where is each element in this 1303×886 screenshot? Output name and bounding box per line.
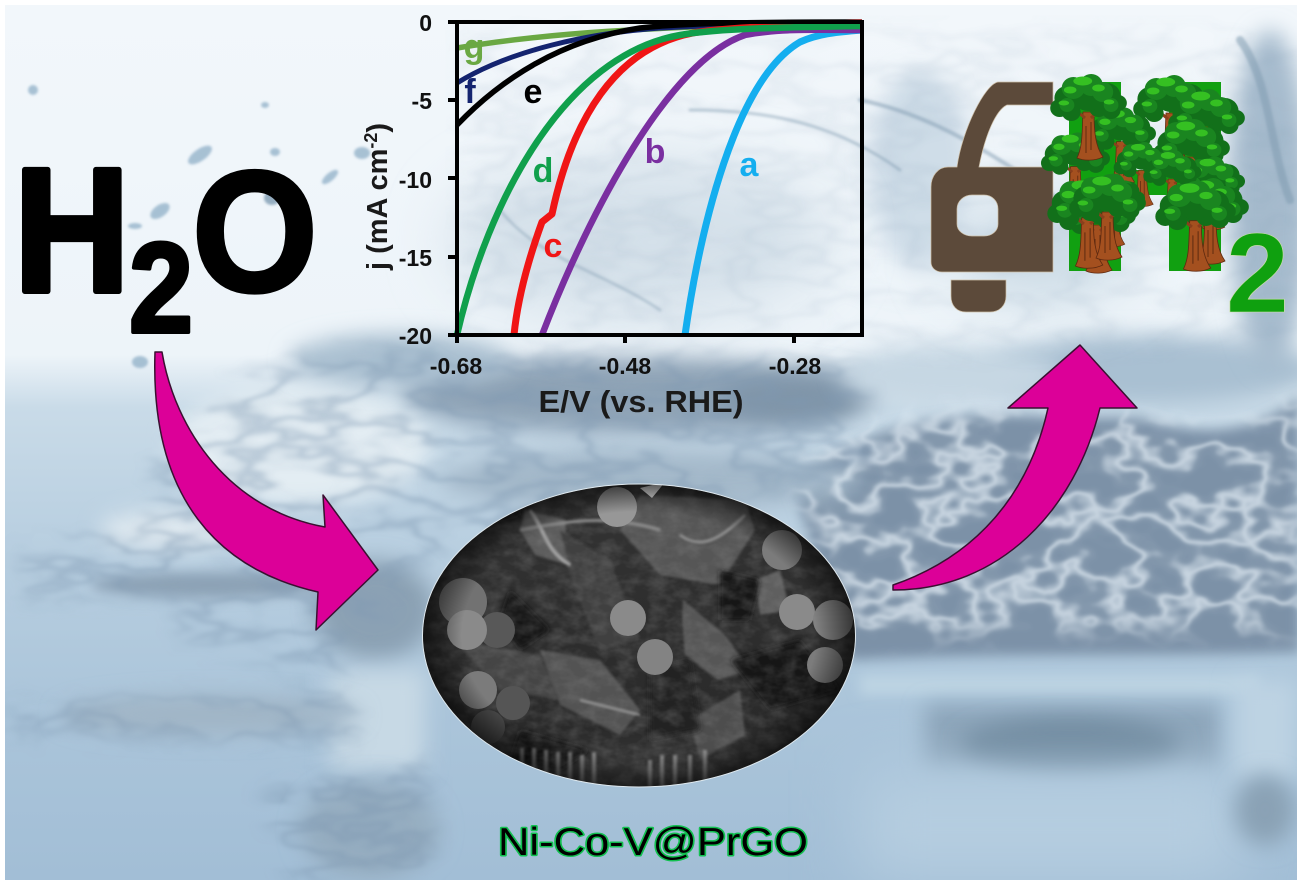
curve b (542, 30, 862, 335)
curve a (685, 30, 862, 335)
chart: polarization curves (361, 10, 862, 419)
title: H2O formula: O (192, 136, 318, 328)
title: H2O formula: H (14, 132, 130, 329)
curve labels (464, 28, 760, 265)
curve e (457, 22, 862, 125)
curve labels: e (524, 73, 542, 111)
x axis tick labels: -0.28 (769, 353, 821, 379)
title: H2O formula: 2 (129, 216, 193, 359)
curve labels: a (740, 146, 760, 184)
subscript 2: 2 (1226, 210, 1289, 336)
curve labels: c (544, 227, 562, 265)
curve labels: d (533, 152, 553, 190)
curve f (457, 23, 862, 83)
y axis tick labels: -15 (399, 245, 432, 271)
catalyst label: Ni-Co-V@PrGO (498, 821, 808, 864)
x axis tick labels: -0.48 (599, 353, 651, 379)
curve g (457, 23, 862, 48)
y axis tick labels: 0 (419, 10, 432, 36)
y axis title: -2 (361, 133, 381, 149)
y axis title: ) (362, 123, 394, 133)
trees group (1041, 74, 1249, 273)
plot curves (457, 22, 862, 335)
x axis tick labels (430, 353, 821, 379)
nanospheres (439, 487, 853, 744)
y axis tick labels: -10 (399, 167, 432, 193)
y axis tick labels: -20 (399, 323, 432, 349)
title: H2O formula (14, 132, 318, 359)
curve labels: b (645, 133, 665, 171)
dark shadows (492, 508, 840, 768)
arrow: from water to catalyst (155, 352, 378, 630)
y axis title: j (mA cm (362, 149, 394, 270)
axes frame and ticks (448, 22, 862, 343)
bottom streaks (522, 748, 705, 790)
letter H made of green bars (1069, 82, 1221, 271)
x axis tick labels: -0.68 (430, 353, 482, 379)
x axis title: E/V (vs. RHE) (538, 384, 744, 419)
icon: car with hydrogen and trees (931, 74, 1289, 336)
graphene flakes (455, 495, 790, 760)
curve labels: g (464, 28, 484, 66)
panel: SEM micrograph oval (420, 480, 860, 790)
curve d (457, 26, 862, 335)
arrow: from catalyst to hydrogen (893, 345, 1137, 590)
y axis tick labels (399, 10, 432, 349)
curve c (514, 23, 862, 335)
icon: car silhouette (931, 82, 1053, 312)
curve labels: f (464, 73, 476, 111)
y axis tick labels: -5 (412, 88, 432, 114)
